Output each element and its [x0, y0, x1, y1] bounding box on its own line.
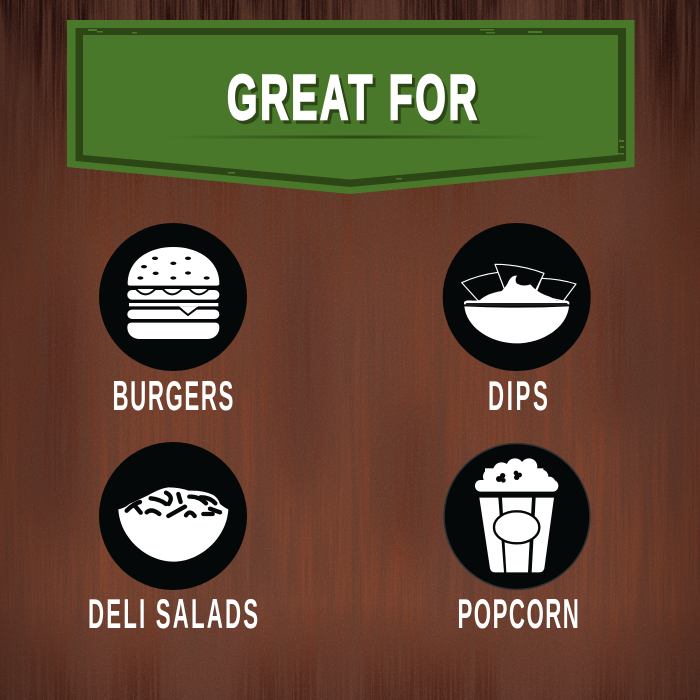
icon: salad bowl [118, 487, 228, 562]
banner: great for [67, 20, 634, 194]
banner title: GREAT FOR [227, 64, 477, 133]
icon: chips and dip [462, 264, 576, 343]
item: dips [443, 223, 591, 420]
burgers circle [99, 223, 247, 371]
deli salads circle [99, 442, 247, 590]
item: deli salads [88, 442, 258, 638]
banner title shadow: GREAT FOR [230, 67, 480, 137]
icon: popcorn bucket [475, 458, 558, 572]
label: burgers: BURGERS [112, 374, 233, 420]
dips circle [443, 223, 591, 371]
label: deli salads: DELI SALADS [88, 592, 258, 638]
banner rule [165, 136, 550, 138]
banner inner border [76, 28, 626, 187]
banner border wear [88, 29, 624, 180]
label: popcorn: POPCORN [458, 592, 579, 638]
popcorn circle [444, 444, 590, 590]
label: dips: DIPS [488, 374, 548, 420]
icon: burger [127, 247, 219, 339]
item: popcorn [444, 444, 590, 638]
item: burgers [99, 223, 247, 420]
banner shape [67, 20, 634, 194]
